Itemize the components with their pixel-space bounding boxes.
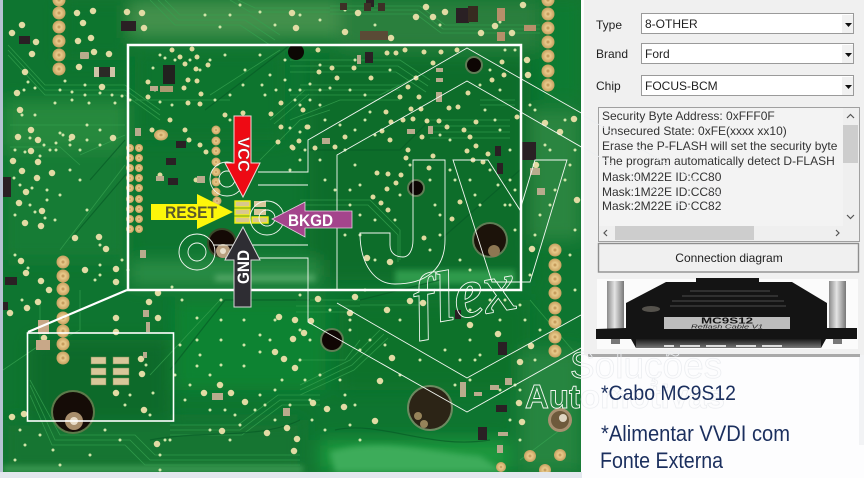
- resistor 122: [94, 67, 115, 77]
- text box: chip notes: Security Byte Address: 0xFFF0F: [602, 109, 775, 123]
- logo letter V: [453, 160, 567, 282]
- arrow: GND: [225, 227, 260, 307]
- text box: chip notes: Mask:1M22E ID:CC80: [602, 185, 722, 199]
- logo word flex: flex: [406, 245, 522, 342]
- board tonal zones: [3, 0, 581, 472]
- board bottom shadow: [0, 472, 582, 478]
- note line: Cabo: *Cabo MC9S12: [601, 382, 736, 405]
- watermark: logo outlines on panel: Automotivas: [525, 378, 725, 415]
- text box: chip notes: The program automatically detect D-FLASH: [602, 154, 835, 168]
- arrow: RESET: [151, 194, 233, 229]
- zoom callout frames: [28, 45, 521, 421]
- field: Brand: Ford: [645, 47, 670, 61]
- text box: chip notes: Erase the P-FLASH will set the security byte: [602, 139, 838, 153]
- field: Brand: [596, 44, 854, 64]
- note line: Alimentar: *Alimentar VVDI com: [601, 421, 790, 446]
- field: Brand: Brand: [596, 47, 628, 61]
- dark copper planes: [70, 45, 520, 442]
- circuit traces: [3, 0, 581, 465]
- text box: chip notes: Unsecured State: 0xFE(xxxx xx10): [602, 124, 787, 138]
- solder pads large: [10, 5, 577, 451]
- note line: Fonte Externa: Fonte Externa: [600, 448, 724, 473]
- PCB holes: [51, 44, 572, 434]
- field: Type: Type: [596, 18, 622, 32]
- field: Chip: Chip: [596, 79, 621, 93]
- field: Chip: [596, 76, 854, 96]
- bright glare: [3, 270, 515, 472]
- panel: PCB photograph: [3, 0, 581, 476]
- arrow: GND: GND: [234, 250, 253, 284]
- text box: chip notes: [598, 108, 860, 242]
- logo letter J: [360, 160, 445, 284]
- watermark: logo outlines on panel: [581, 124, 724, 408]
- highlighted test pads: [235, 201, 268, 223]
- image: MC9S12 cable connector: MC9S12: [701, 316, 754, 326]
- image: MC9S12 cable connector: [596, 278, 858, 349]
- text box: chip notes: Mask:0M22E ID:CC80: [602, 170, 722, 184]
- arrow: BKGD: BKGD: [288, 211, 333, 230]
- watermark: logo outlines on PCB: Soluções: [570, 345, 722, 386]
- board left edge: [0, 0, 3, 472]
- IC at box top: [163, 65, 175, 84]
- note: cable and power supply: [600, 382, 790, 473]
- pin headers: [52, 0, 566, 476]
- text box: chip notes: Mask:2M22E ID:CC82: [602, 199, 722, 213]
- field: Type: 8-OTHER: [645, 17, 698, 31]
- button: Connection diagram: [598, 244, 858, 272]
- arrow: VCC: VCC: [234, 137, 253, 172]
- arrow: VCC: [225, 116, 260, 197]
- pads near arrows: [254, 201, 266, 215]
- image: MC9S12 cable connector: Reflash Cable V1: [691, 324, 763, 330]
- surface-mount components: [3, 0, 545, 453]
- field: Chip: FOCUS-BCM: [645, 79, 718, 93]
- transistors and ICs: [3, 0, 536, 440]
- divider bar: [588, 354, 860, 357]
- field: Type: [596, 14, 854, 34]
- watermark: logo outlines on panel: Soluções: [570, 345, 722, 386]
- arrow: BKGD: [272, 202, 352, 237]
- small pads in inset box: [91, 357, 129, 385]
- arrow: RESET: RESET: [165, 204, 217, 222]
- watermark: logo outlines on PCB: [178, 48, 581, 412]
- logo words: Automotivas: [525, 378, 725, 415]
- resistor row top: [340, 3, 536, 41]
- panel: software settings: [584, 0, 864, 445]
- button: Connection diagram: Connection diagram: [675, 251, 783, 265]
